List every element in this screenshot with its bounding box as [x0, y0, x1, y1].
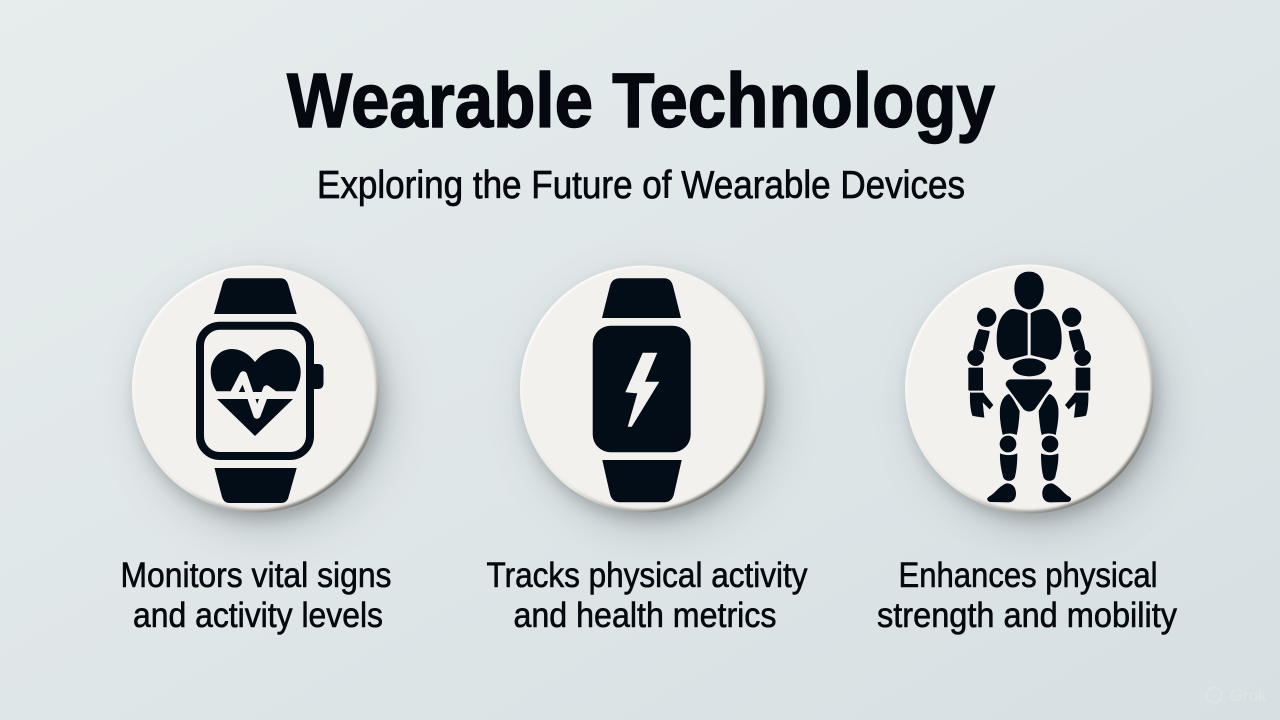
title: Wearable Technology: [287, 58, 995, 144]
icon: smartwatch with heart: [200, 278, 324, 503]
watermark: Grok: [1206, 686, 1267, 705]
caption: physical activity: and health metrics: [514, 596, 776, 635]
icon: lightning bolt: [625, 353, 659, 427]
disc: watch badge: [132, 266, 388, 527]
panel: physical activity: [486, 266, 808, 635]
watermark: Grok: Grok: [1230, 686, 1267, 705]
disc: band badge: [520, 266, 776, 527]
panel: strength and mobility: [877, 264, 1177, 635]
subtitle: Exploring the Future of Wearable Devices: [317, 164, 965, 207]
disc: figure badge: [905, 264, 1162, 527]
caption: physical activity: Tracks physical activity: [486, 556, 808, 595]
panel: vital signs: [120, 266, 392, 635]
caption: vital signs: and activity levels: [133, 596, 383, 635]
caption: strength and mobility: strength and mobility: [877, 596, 1177, 635]
icon: articulated figure: [967, 272, 1091, 502]
icon: fitness band with bolt: [593, 278, 691, 502]
caption: strength and mobility: Enhances physical: [898, 556, 1158, 595]
caption: vital signs: Monitors vital signs: [120, 556, 392, 595]
